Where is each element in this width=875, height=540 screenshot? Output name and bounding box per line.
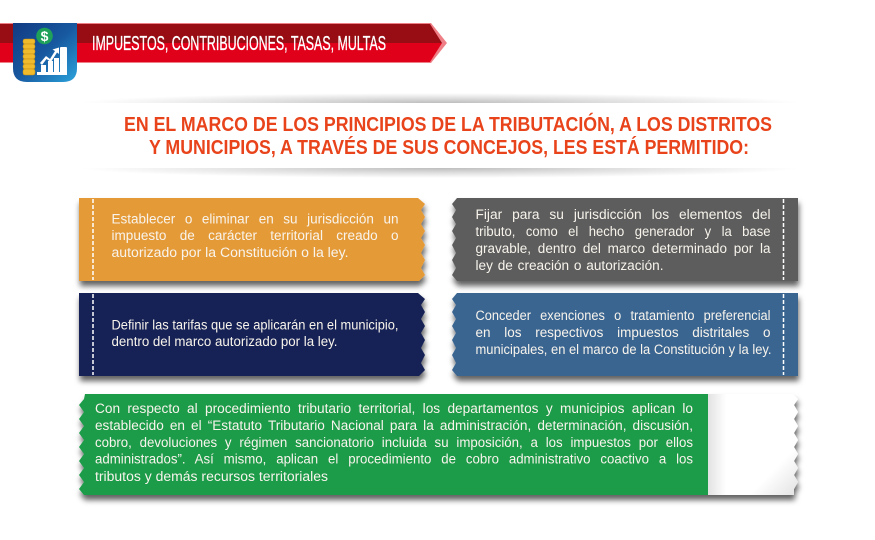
text: procedimiento tributario territorial: administrados”. Así mismo, aplican el procedimiento de cobro administrativo coactivo a los xyxy=(95,452,693,466)
icon: coin stack xyxy=(23,39,35,75)
banner title: IMPUESTOS, CONTRIBUCIONES, TASAS, MULTAS xyxy=(92,32,386,55)
panel: green note with white tab xyxy=(79,394,798,495)
panel: navy card xyxy=(79,293,425,376)
text: fijar para su jurisdiccion: gravable, dentro del marco determinado por la xyxy=(476,241,771,256)
icon: coins and growth chart xyxy=(13,23,77,82)
text: fijar para su jurisdiccion: ley de creación o autorización. xyxy=(476,258,664,273)
text: definir las tarifas: Definir las tarifas que se aplicarán en el municipio, xyxy=(112,318,398,332)
text: procedimiento tributario territorial: tributos y demás recursos territoriales xyxy=(95,469,328,484)
text: establecer o eliminar: Establecer o eliminar en su jurisdicción un xyxy=(112,212,398,226)
text: procedimiento tributario territorial: cobro, devoluciones y régimen sancionatorio incluida su imposición, a los impuestos por ellos xyxy=(95,435,693,450)
text: procedimiento tributario territorial: establecido en el “Estatuto Tributario Nacional para la administración, determinación, discusión, xyxy=(95,418,693,433)
text: procedimiento tributario territorial xyxy=(95,401,693,484)
card shape: green body and white torn tab xyxy=(79,394,798,495)
text: establecer o eliminar: autorizado por la Constitución o la ley. xyxy=(112,245,348,260)
text: fijar para su jurisdiccion: tributo, como el hecho generador y la base xyxy=(476,224,770,239)
text: conceder exenciones: en los respectivos impuestos distritales o xyxy=(476,325,770,340)
text: procedimiento tributario territorial: Con respecto al procedimiento tributario territorial, los departamentos y municipios aplican lo xyxy=(95,401,693,416)
panel: orange card xyxy=(79,198,425,281)
text: establecer o eliminar xyxy=(112,212,398,260)
text: definir las tarifas: dentro del marco autorizado por la ley. xyxy=(112,334,338,349)
title shadow top xyxy=(129,94,752,103)
main heading: Y MUNICIPIOS, A TRAVÉS DE SUS CONCEJOS, LES ESTÁ PERMITIDO: xyxy=(149,136,749,159)
banner ribbon xyxy=(0,23,447,63)
text: conceder exenciones: Conceder exenciones o tratamiento preferencial xyxy=(476,308,770,323)
panel: blue card xyxy=(452,293,798,376)
main heading: EN EL MARCO DE LOS PRINCIPIOS DE LA TRIBUTACIÓN, A LOS DISTRITOS xyxy=(124,112,772,136)
panel: gray card xyxy=(452,198,798,281)
icon: bar chart xyxy=(37,47,67,75)
title shadow bottom xyxy=(128,168,752,176)
text: establecer o eliminar: impuesto de carácter territorial creado o xyxy=(112,228,398,243)
text: fijar para su jurisdiccion xyxy=(476,207,771,273)
text: fijar para su jurisdiccion: Fijar para su jurisdicción los elementos del xyxy=(476,207,770,222)
text: conceder exenciones xyxy=(476,308,772,357)
icon: dollar coin: $ xyxy=(41,28,49,44)
text: conceder exenciones: municipales, en el marco de la Constitución y la ley. xyxy=(476,342,772,357)
text: definir las tarifas xyxy=(112,318,398,349)
main heading xyxy=(124,112,772,159)
